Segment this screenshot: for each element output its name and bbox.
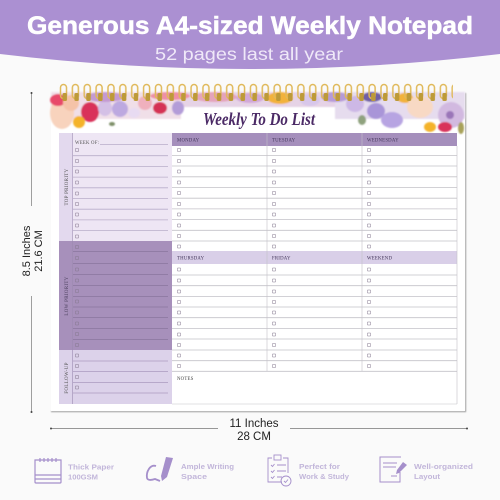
subtitle: 52 pages last all year xyxy=(155,44,343,64)
label: week of: WEEK OF: xyxy=(75,141,99,146)
spiral binding xyxy=(59,82,453,104)
feature: perfect for work and study: Perfect for xyxy=(299,462,340,471)
day header: thursday to weekend: WEEKEND xyxy=(367,256,392,262)
left column rule lines xyxy=(73,144,168,231)
day header: monday to wednesday xyxy=(172,133,457,146)
icon: pen and scribble xyxy=(147,457,173,481)
feature: well-organized layout: Well-organized xyxy=(414,462,473,471)
day grid lines xyxy=(172,156,457,371)
notepad title: Weekly To Do List xyxy=(203,109,316,129)
feature: ample writing space xyxy=(147,457,234,481)
height dimension xyxy=(21,92,45,413)
width dimension xyxy=(50,418,468,443)
label: 28 cm: 28 CM xyxy=(237,431,271,443)
day header: thursday to weekend xyxy=(172,251,457,264)
notepad xyxy=(50,82,466,412)
label: low priority: LOW PRIORITY xyxy=(65,276,70,316)
label: follow-up: FOLLOW-UP xyxy=(65,362,70,394)
icon: document and pen xyxy=(380,457,407,482)
day header: monday to wednesday: MONDAY xyxy=(177,138,200,144)
checkboxes xyxy=(76,148,78,389)
feature: thick paper xyxy=(35,458,114,483)
feature: perfect for work and study xyxy=(268,455,350,486)
day header: thursday to weekend: THURSDAY xyxy=(177,256,205,262)
banner xyxy=(0,0,500,69)
day header: monday to wednesday: WEDNESDAY xyxy=(367,138,399,144)
panel: follow-up xyxy=(59,350,172,404)
day header: monday to wednesday: TUESDAY xyxy=(272,138,296,144)
label: top priority: TOP PRIORITY xyxy=(65,168,70,206)
label: notes: NOTES xyxy=(177,377,194,382)
feature: thick paper: Thick Paper xyxy=(68,462,114,472)
planner table xyxy=(59,133,457,404)
feature: ample writing space: Space xyxy=(181,472,207,481)
floral header xyxy=(50,92,465,134)
icon: clipboard checklist xyxy=(268,455,291,486)
day header: thursday to weekend: FRIDAY xyxy=(272,256,291,262)
panel: low priority xyxy=(59,241,172,350)
icon: notebook xyxy=(35,458,61,483)
label: 8.5 inches: 8.5 Inches xyxy=(21,225,33,276)
feature: ample writing space: Ample Writing xyxy=(181,462,234,471)
label: 11 inches: 11 Inches xyxy=(229,418,279,430)
feature: thick paper: 100GSM xyxy=(68,472,98,482)
feature: well-organized layout xyxy=(380,457,473,482)
title: Generous A4-sized Weekly Notepad xyxy=(27,12,473,40)
label: 21.6 cm: 21.6 CM xyxy=(33,230,45,272)
feature: well-organized layout: Layout xyxy=(414,472,441,481)
panel: top priority xyxy=(59,133,172,241)
feature: perfect for work and study: Work & Study xyxy=(299,472,350,481)
